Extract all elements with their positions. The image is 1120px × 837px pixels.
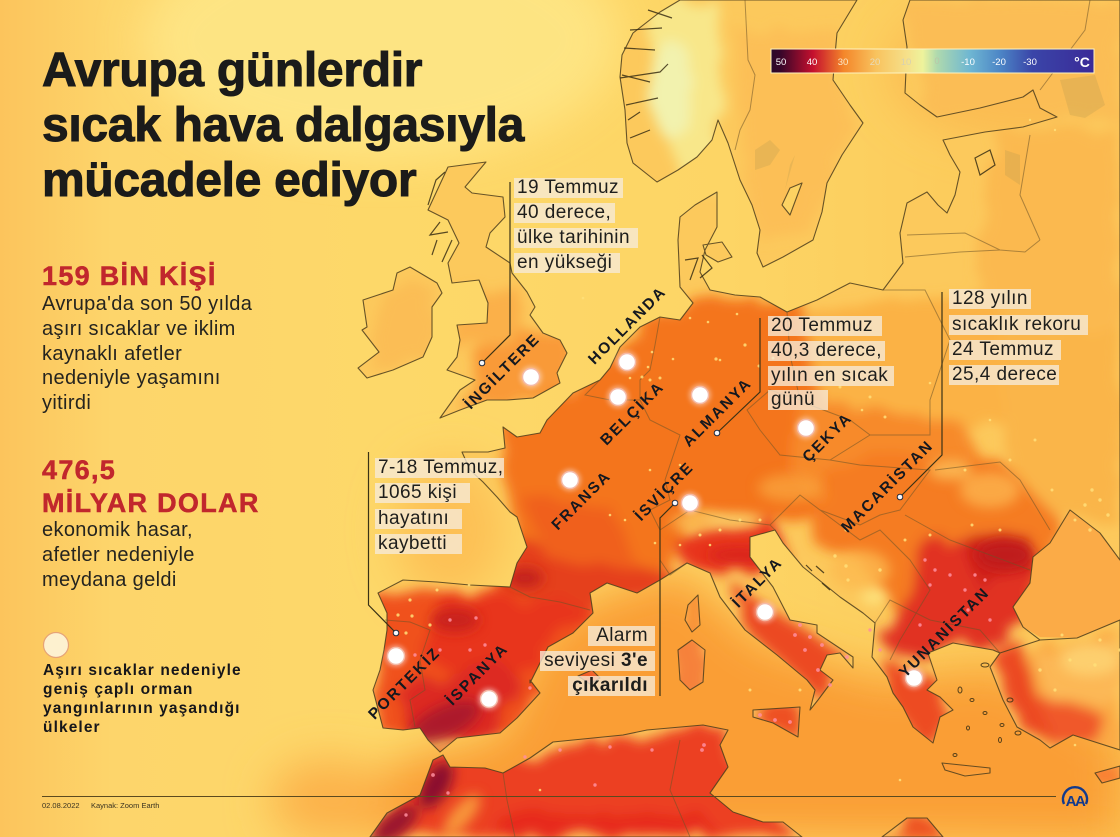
wildfire markers (385, 351, 925, 710)
temperature scale: 0 (934, 56, 940, 67)
AA logo: AA (1066, 793, 1086, 810)
label: Çekya: ÇEKYA (799, 409, 856, 466)
fire and hot-spot dots (396, 119, 1120, 791)
fjords and coastal inlets (428, 10, 995, 590)
legend text: geniş çaplı orman (43, 681, 194, 698)
Aegean islands (953, 663, 1021, 756)
stat: damage text: afetler nedeniyle (42, 544, 195, 566)
title: sıcak hava dalgasıyla (42, 99, 524, 152)
temperature scale: -30 (1023, 57, 1037, 68)
temperature scale: -20 (992, 57, 1006, 68)
label: Yunanistan: YUNANİSTAN (896, 584, 993, 681)
callout: Germany (768, 315, 894, 410)
text: 24 Temmuz (952, 339, 1054, 360)
temperature scale: °C (1074, 54, 1090, 70)
legend text: ülkeler (43, 719, 101, 736)
text: kaybetti (378, 533, 447, 554)
legend text (43, 662, 242, 736)
text: çıkarıldı (572, 675, 648, 696)
stat: deaths text (42, 293, 252, 414)
lakes (755, 75, 1105, 190)
stat: damage heading: MİLYAR DOLAR (42, 488, 260, 518)
text: yılın en sıcak (771, 365, 888, 386)
label: Hollanda: HOLLANDA (585, 283, 670, 368)
text: 40 derece, (517, 202, 611, 223)
stat: deaths text: yitirdi (42, 392, 91, 414)
Black Sea (1013, 510, 1120, 638)
text: günü (771, 389, 815, 410)
text: 25,4 derece (952, 364, 1057, 385)
leader line end points (393, 360, 903, 636)
legend marker (44, 632, 68, 658)
temperature scale: 30 (838, 57, 848, 68)
temperature scale: 40 (807, 57, 817, 68)
stat: deaths heading: 159 BİN KİŞİ (42, 261, 217, 291)
label: Portekiz: PORTEKİZ (365, 644, 444, 723)
stat: deaths text: aşırı sıcaklar ve iklim (42, 318, 236, 340)
AA logo (1063, 787, 1087, 810)
text: 1065 kişi (378, 482, 457, 503)
callout: Switzerland (540, 625, 655, 696)
temperature scale: 20 (870, 57, 880, 68)
footer rule (42, 796, 1056, 798)
title: Avrupa günlerdir (42, 44, 422, 97)
label: İngiltere: İNGİLTERE (461, 330, 544, 413)
callout: Portugal (375, 457, 504, 554)
text: en yükseği (517, 252, 612, 273)
coastlines (358, 0, 1120, 837)
stat: deaths text: Avrupa'da son 50 yılda (42, 293, 252, 315)
legend text: yangınlarının yaşandığı (43, 700, 241, 717)
label: Macaristan: MACARİSTAN (838, 437, 937, 536)
text: Alarm (596, 625, 648, 646)
legend text: Aşırı sıcaklar nedeniyle (43, 662, 242, 679)
leader lines (368, 182, 942, 696)
label: İspanya: İSPANYA (443, 640, 512, 709)
title (42, 44, 526, 207)
temperature scale: 10 (901, 57, 911, 68)
stat: deaths text: nedeniyle yaşamını (42, 367, 221, 389)
text: ülke tarihinin (517, 227, 630, 248)
stat: damage heading: 476,5 (42, 455, 116, 485)
label: Fransa: FRANSA (549, 468, 615, 534)
text: sıcaklık rekoru (952, 314, 1081, 335)
footer date and source: 02.08.2022 (42, 801, 80, 810)
footer date and source: Kaynak: Zoom Earth (91, 801, 159, 810)
label: İtalya: İTALYA (729, 554, 786, 611)
label: Almanya: ALMANYA (680, 375, 756, 451)
temperature scale: 50 (776, 57, 786, 68)
text: 20 Temmuz (771, 315, 873, 336)
text: seviyesi 3'e (544, 650, 648, 671)
stat: damage text (42, 519, 195, 591)
text: hayatını (378, 508, 449, 529)
text: 19 Temmuz (517, 177, 619, 198)
text: 128 yılın (952, 288, 1028, 309)
callout: Hungary (949, 288, 1088, 385)
country borders (385, 0, 1090, 837)
callout: United Kingdom (372, 2, 1070, 834)
land temperature fields (359, 0, 1120, 837)
title: mücadele ediyor (42, 154, 416, 207)
stat: deaths text: kaynaklı afetler (42, 343, 182, 365)
stat: damage heading (42, 455, 260, 518)
footer date and source (42, 801, 159, 810)
stat: damage text: ekonomik hasar, (42, 519, 193, 541)
label: İsviçre: İSVİÇRE (632, 459, 698, 525)
temperature scale (771, 49, 1094, 73)
text: 7-18 Temmuz, (378, 457, 503, 478)
label: Belçika: BELÇİKA (597, 378, 668, 449)
stat: damage text: meydana geldi (42, 569, 177, 591)
temperature scale: -10 (961, 57, 975, 68)
text: 40,3 derece, (771, 340, 882, 361)
